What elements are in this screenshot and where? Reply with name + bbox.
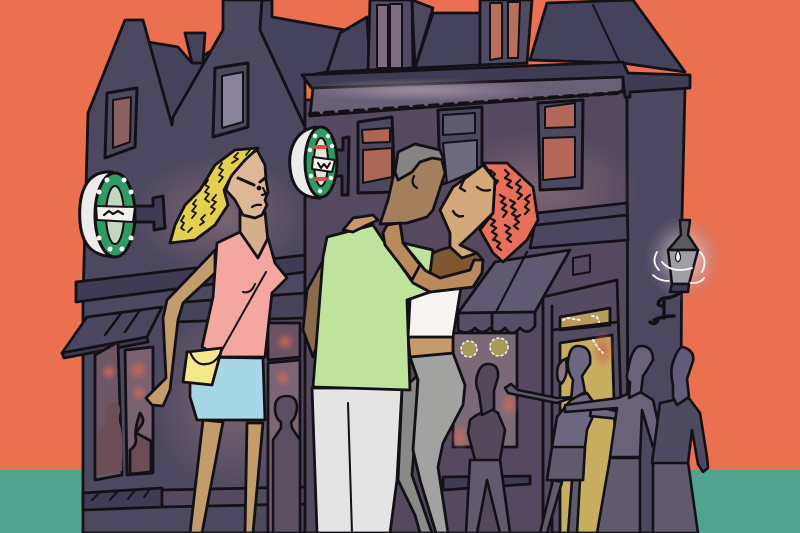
person: man far right xyxy=(652,347,708,533)
building: shop windows left xyxy=(95,342,153,480)
couple: man xyxy=(303,144,445,533)
partner: hand on shoulder xyxy=(343,215,378,232)
building: dormer left xyxy=(368,0,433,70)
building: shop window right xyxy=(450,333,519,451)
partner: hand raised xyxy=(383,223,420,280)
window: upper shop 2 xyxy=(438,107,482,185)
man: ear xyxy=(413,176,417,188)
woman: legs xyxy=(190,420,263,533)
partner: neck and shoulder xyxy=(413,233,483,292)
building: dormer right xyxy=(480,0,532,65)
window: centre gable xyxy=(213,63,248,137)
background people xyxy=(273,346,708,533)
man: white trousers xyxy=(312,388,402,533)
building: window right of awning xyxy=(573,255,590,275)
partner: arm around man xyxy=(383,223,483,292)
building: cornice xyxy=(302,62,690,116)
woman: arm xyxy=(146,250,215,406)
man: head and neck xyxy=(380,152,445,224)
window: upper shop 1 xyxy=(358,117,395,193)
partner: closed-eye face xyxy=(453,180,490,216)
partner: grey leggings xyxy=(398,353,465,533)
wall lamp xyxy=(644,214,724,324)
building: warm light on walls xyxy=(130,78,640,500)
building: sill right xyxy=(443,476,530,490)
woman: head xyxy=(226,150,268,218)
hanging sign: left xyxy=(80,172,165,257)
man: green shirt xyxy=(313,225,430,390)
building: rear roof and chimney xyxy=(148,33,212,120)
person: man centre right xyxy=(565,346,662,533)
building: shop window centre xyxy=(268,323,300,533)
partner: white top xyxy=(408,273,463,337)
windows xyxy=(105,63,583,193)
building: door right xyxy=(543,280,625,533)
building: ledges left xyxy=(76,255,305,322)
building: ledge right xyxy=(530,203,628,248)
building: main house wall xyxy=(305,92,628,533)
person: woman with ponytail xyxy=(505,346,628,533)
woman: yellow bag xyxy=(183,348,222,385)
building: roof beside gable xyxy=(260,0,345,127)
building xyxy=(62,0,690,533)
building: left gabled house xyxy=(83,0,305,533)
woman: curly blonde hair xyxy=(170,148,258,243)
man: grey hair xyxy=(395,144,444,180)
jealous woman xyxy=(146,148,287,533)
man: arm behind xyxy=(303,257,325,357)
background: teal ground xyxy=(0,470,800,533)
partner: red curly hair xyxy=(480,163,538,262)
woman: strap and bust line xyxy=(222,272,266,350)
woman: pink top xyxy=(202,232,287,357)
woman: skirt xyxy=(190,357,265,420)
woman: neck xyxy=(240,210,268,258)
building: right awning xyxy=(458,250,570,333)
person: silhouette in centre window xyxy=(273,396,300,533)
building: shop awning left xyxy=(62,307,162,358)
building: right side wall xyxy=(627,88,685,533)
building: mansard roof xyxy=(327,0,685,72)
window: left gable xyxy=(105,88,137,158)
person: man by window xyxy=(466,364,510,533)
partner: head xyxy=(440,165,495,258)
building: doorstep left xyxy=(83,487,305,510)
man: shirt shoulder right xyxy=(403,243,433,273)
woman: angry face xyxy=(238,178,266,207)
window: upper shop 3 xyxy=(538,100,583,190)
couple: partner xyxy=(383,163,538,533)
hanging sign: centre xyxy=(290,127,349,198)
partner: midriff xyxy=(408,337,453,357)
